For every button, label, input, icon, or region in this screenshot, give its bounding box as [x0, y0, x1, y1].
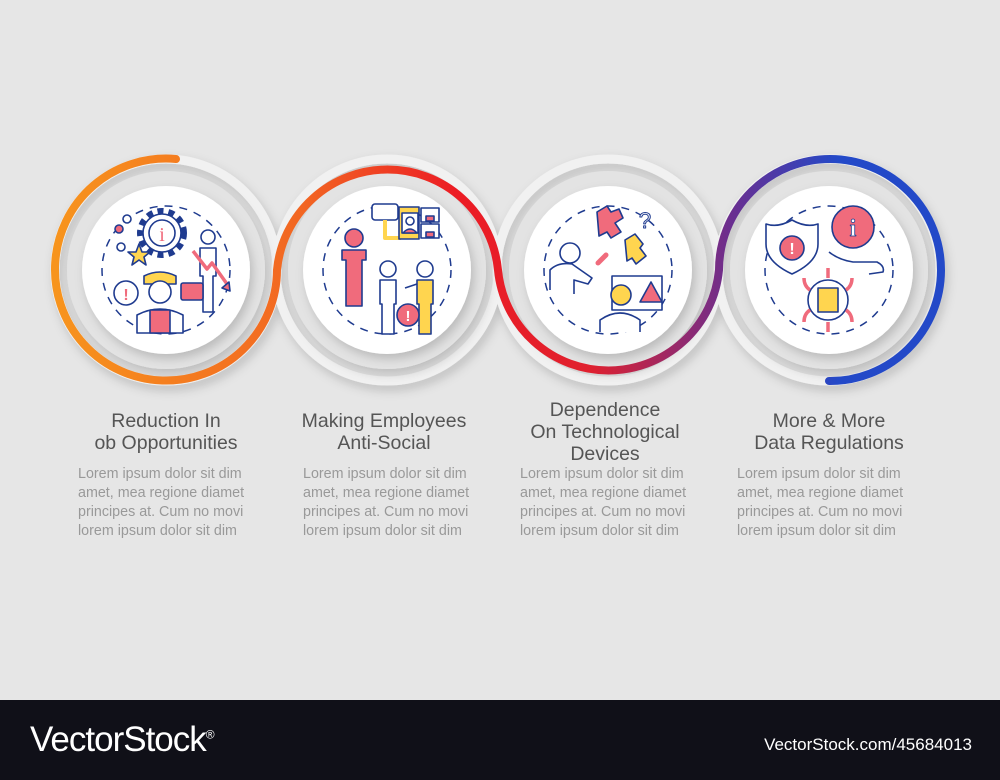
title 3: Dependence — [550, 399, 660, 421]
icon: tech dependence: ? — [639, 208, 651, 233]
body 4: Lorem ipsum dolor sit dim amet, mea regione diamet principes at. Cum no movi lorem ipsum dolor sit dim — [737, 466, 903, 539]
footer url: VectorStock.com/45684013 — [764, 735, 972, 754]
title 2 — [302, 410, 466, 454]
icon: job reduction: ! — [123, 287, 129, 304]
icon: tech dependence — [550, 206, 662, 332]
icon: job reduction: i — [159, 224, 165, 246]
icon: data regulations: ! — [789, 241, 795, 258]
body 3: Lorem ipsum dolor sit dim amet, mea regione diamet principes at. Cum no movi lorem ipsum dolor sit dim — [520, 466, 686, 539]
icon: anti-social: ! — [406, 308, 410, 325]
gradient path — [55, 159, 941, 381]
dashed inner circles — [102, 206, 893, 334]
body 2: Lorem ipsum dolor sit dim amet, mea regione diamet principes at. Cum no movi lorem ipsum dolor sit dim — [303, 466, 469, 539]
icon: data regulations: i — [850, 216, 857, 242]
title 1 — [94, 410, 238, 454]
white circles — [82, 186, 913, 354]
title 2: Anti-Social — [337, 432, 431, 454]
footer bar — [0, 700, 1000, 780]
title 2: Making Employees — [302, 410, 466, 432]
title 3 — [530, 399, 680, 465]
title 1: Reduction In — [111, 410, 221, 432]
icon: anti-social — [342, 204, 439, 334]
title 4: More & More — [773, 410, 885, 432]
icon: job reduction — [114, 211, 230, 333]
title 3: Devices — [570, 443, 640, 465]
light background rings — [55, 159, 940, 381]
title 3: On Technological — [530, 421, 680, 443]
body 1: Lorem ipsum dolor sit dim amet, mea regione diamet principes at. Cum no movi lorem ipsum dolor sit dim — [78, 466, 244, 539]
title 4 — [754, 410, 904, 454]
icon: data regulations — [766, 206, 883, 332]
title 1: ob Opportunities — [94, 432, 238, 454]
title 4: Data Regulations — [754, 432, 904, 454]
footer logo: VectorStock® — [30, 720, 214, 759]
gray inner discs — [67, 171, 928, 369]
